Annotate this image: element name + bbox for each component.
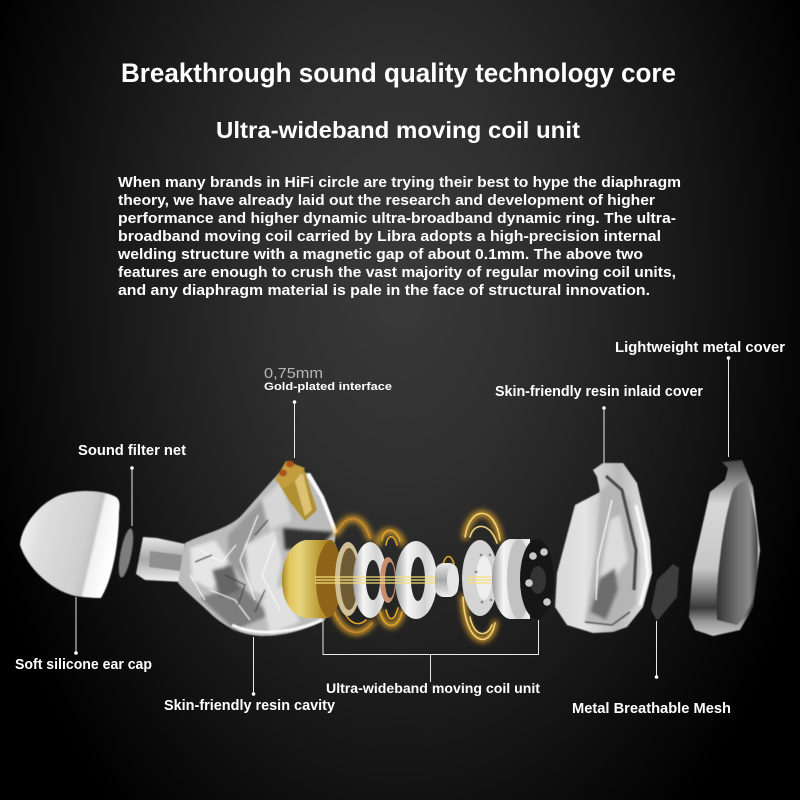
- line: inlaid cover: [602, 406, 606, 463]
- line: metal breathable mesh: [655, 621, 658, 679]
- subtitle: Ultra-wideband moving coil unit: [216, 117, 580, 143]
- label: sound filter net: Sound filter net: [78, 442, 186, 459]
- text block: description: features are enough to crush the vast majority of regular moving coil units,: [118, 264, 676, 281]
- label: resin cavity: Skin-friendly resin cavity: [164, 697, 336, 714]
- copper ring: [380, 557, 396, 603]
- text block: description: welding structure with a magnetic gap of about 0.1mm. The above two: [117, 246, 643, 263]
- icon: ultra-wideband moving coil unit: [282, 513, 554, 639]
- gold cylinder: [282, 540, 342, 618]
- icon: sound filter net: [116, 527, 136, 579]
- spool: [435, 563, 458, 597]
- label: inlaid cover: Skin-friendly resin inlaid cover: [495, 383, 703, 400]
- text block: description: performance and higher dynamic ultra-broadband dynamic ring. The ultra-: [118, 210, 676, 227]
- line: sound filter net: [130, 466, 134, 526]
- icon: soft silicone ear cap: [20, 491, 120, 598]
- bracket: moving coil unit: [323, 620, 538, 682]
- line: gold-plated interface: [293, 400, 296, 458]
- label: dimension: 0,75mm: [264, 365, 323, 382]
- text block: description: theory, we have already laid out the research and development of higher: [118, 192, 655, 209]
- silver disc: [462, 540, 498, 616]
- title: Breakthrough sound quality technology core: [121, 58, 676, 88]
- icon: lightweight metal cover: [689, 460, 760, 636]
- line: resin cavity: [252, 637, 255, 696]
- label: moving coil unit: Ultra-wideband moving coil unit: [326, 680, 540, 696]
- text block: description: [117, 174, 681, 299]
- label: lightweight metal cover: Lightweight metal cover: [615, 339, 785, 356]
- icon: metal breathable mesh: [651, 564, 679, 621]
- label: ear cap: Soft silicone ear cap: [15, 656, 152, 673]
- shell texture: [190, 480, 334, 634]
- icon: gold-plated interface: [275, 461, 317, 521]
- icon: resin inlaid cover: [555, 463, 652, 633]
- label: gold-plated interface: Gold-plated interface: [264, 381, 392, 393]
- text block: description: When many brands in HiFi circle are trying their best to hype the diaphragm: [118, 174, 681, 191]
- screws: [525, 548, 551, 606]
- line: metal cover: [727, 356, 730, 457]
- line: ear cap: [74, 597, 78, 655]
- icon: resin cavity earphone shell: [136, 472, 336, 636]
- label: metal breathable mesh: Metal Breathable Mesh: [572, 700, 731, 717]
- callout lines: [74, 356, 730, 696]
- black plate: [520, 539, 554, 619]
- text block: description: broadband moving coil carried by Libra adopts a high-precision internal: [118, 228, 661, 245]
- shell body: [178, 472, 336, 636]
- gold sound wave arcs: [330, 513, 500, 639]
- thin ring: [335, 542, 361, 616]
- white washer: [353, 542, 387, 618]
- nozzle: [136, 537, 185, 582]
- text block: description: and any diaphragm material is pale in the face of structural innovation.: [118, 282, 650, 299]
- silver cylinder: [492, 539, 530, 619]
- large silver ring: [395, 541, 437, 619]
- gold axis light: [315, 577, 492, 583]
